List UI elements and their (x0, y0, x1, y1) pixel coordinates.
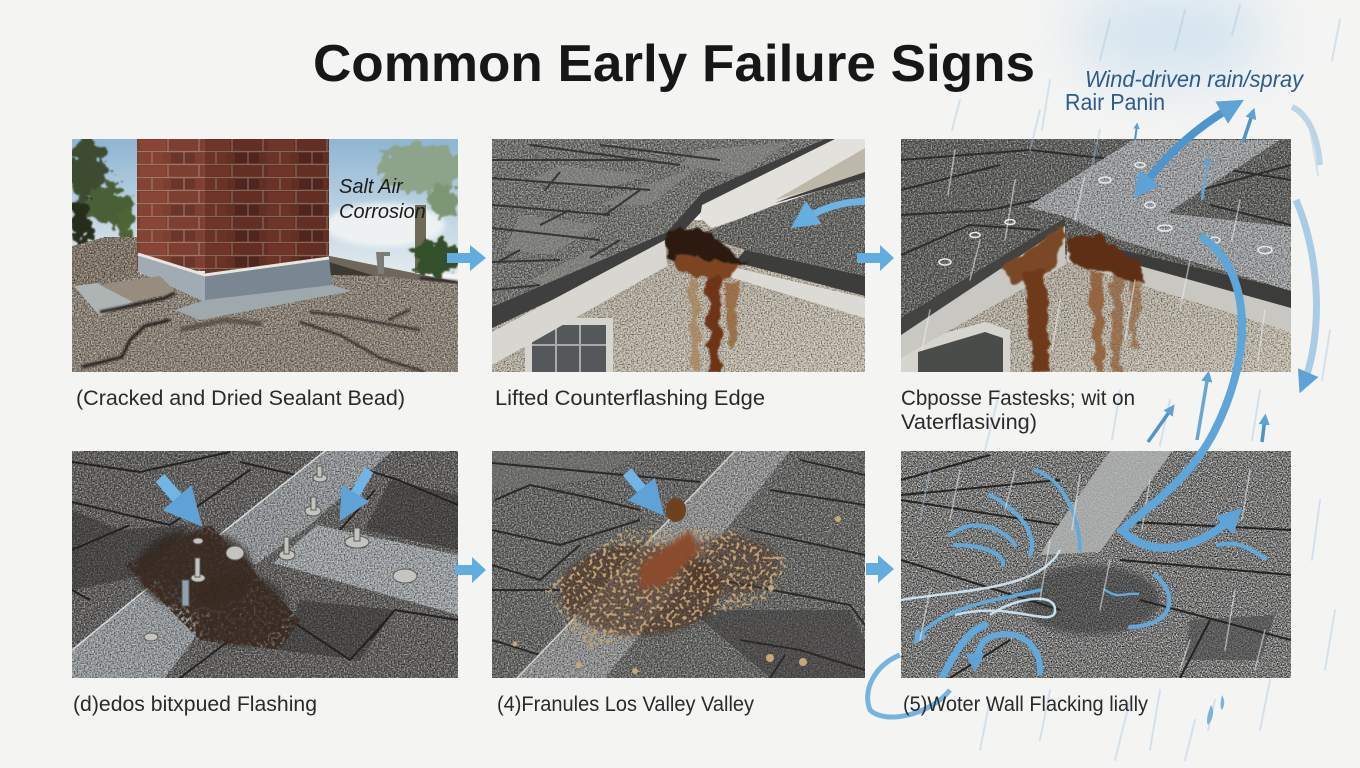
white water channels (901, 550, 1060, 617)
rust stain (668, 228, 745, 372)
main roof (72, 272, 458, 372)
metal flashing (1027, 140, 1291, 291)
cracks (82, 278, 458, 372)
panel 2: lifted counterflashing (492, 139, 896, 372)
window (901, 322, 1010, 372)
title: Common Early Failure Signs (313, 35, 1035, 93)
panel 1: cracked sealant at chimney (68, 139, 464, 372)
panel 3: corroded fasteners in rain (901, 139, 1291, 372)
upward blue wind arrows (1135, 112, 1265, 442)
salt air label: Salt Air (339, 176, 404, 198)
blue arrow left (160, 478, 192, 515)
debris pile (125, 525, 300, 650)
shingles (901, 451, 1291, 678)
caption 4: (d)edos bitxpued Flashing (73, 693, 317, 716)
back roof (72, 237, 140, 292)
water drops below sixth panel (1207, 695, 1224, 725)
blue swirl arrows (917, 470, 1265, 690)
panel 4: exposed fasteners on flashing (72, 451, 458, 678)
granules (512, 498, 841, 674)
connector arrow 4 to 5 (455, 557, 486, 583)
white fascia (492, 240, 667, 365)
right palm (378, 144, 464, 275)
rain over photos (920, 150, 1265, 670)
fasteners (144, 466, 417, 641)
sky glow behind wind label (1070, 0, 1270, 85)
valley metal (517, 451, 790, 678)
lower right roof (690, 176, 865, 276)
caption 5: (4)Franules Los Valley Valley (497, 693, 754, 716)
stucco wall (945, 255, 1291, 372)
caption 3: Cbposse Fastesks; wit on (901, 387, 1135, 410)
left fascia (901, 222, 1065, 358)
caption 6: (5)Woter Wall Flacking lially (903, 693, 1148, 716)
blue arrow right (346, 470, 369, 510)
panel 6: water flow on shingles (901, 451, 1291, 690)
panel 5: granule loss in valley (492, 451, 870, 678)
blue arrow (627, 472, 655, 505)
dark gutter band (492, 139, 862, 328)
chimney (137, 139, 329, 276)
vent pipe (376, 252, 390, 274)
rust stains (1002, 225, 1145, 372)
metal strips (72, 451, 458, 678)
double-headed wind arrow (1140, 105, 1235, 190)
large arc arrow over third panel (1122, 238, 1242, 548)
curved blue arrow (800, 201, 896, 222)
shingles (72, 451, 458, 678)
connector arrow 2 to 3 (857, 245, 894, 271)
wind-driven rain label: Wind-driven rain/spray (1085, 66, 1304, 92)
caption 1: (Cracked and Dried Sealant Bead) (76, 387, 405, 410)
connector arrow 1 to 2 (447, 245, 486, 271)
caption 3: Vaterflasiving) (901, 411, 1037, 434)
left palm (68, 140, 135, 246)
caption 2: Lifted Counterflashing Edge (495, 387, 765, 410)
loose flashing piece (74, 283, 133, 316)
water drops (939, 162, 1272, 265)
shingles (901, 139, 1291, 339)
right fascia (1067, 244, 1291, 332)
sky (72, 139, 458, 274)
window (525, 318, 613, 372)
metal flashing under water (1040, 451, 1172, 555)
wind-driven rain label: Rair Panin (1065, 89, 1165, 115)
pale right arc arrow (1296, 200, 1316, 385)
stucco wall (492, 220, 865, 372)
curved arrow at lower left of sixth panel (868, 655, 950, 717)
salt air label: Corrosion (339, 201, 426, 223)
step flashing (138, 254, 352, 320)
rain streaks (920, 5, 1340, 760)
connector arrow 5 to 6 (866, 555, 894, 583)
shingles (492, 451, 865, 678)
lifted flashing edge (700, 139, 865, 228)
left shingles (492, 139, 825, 307)
